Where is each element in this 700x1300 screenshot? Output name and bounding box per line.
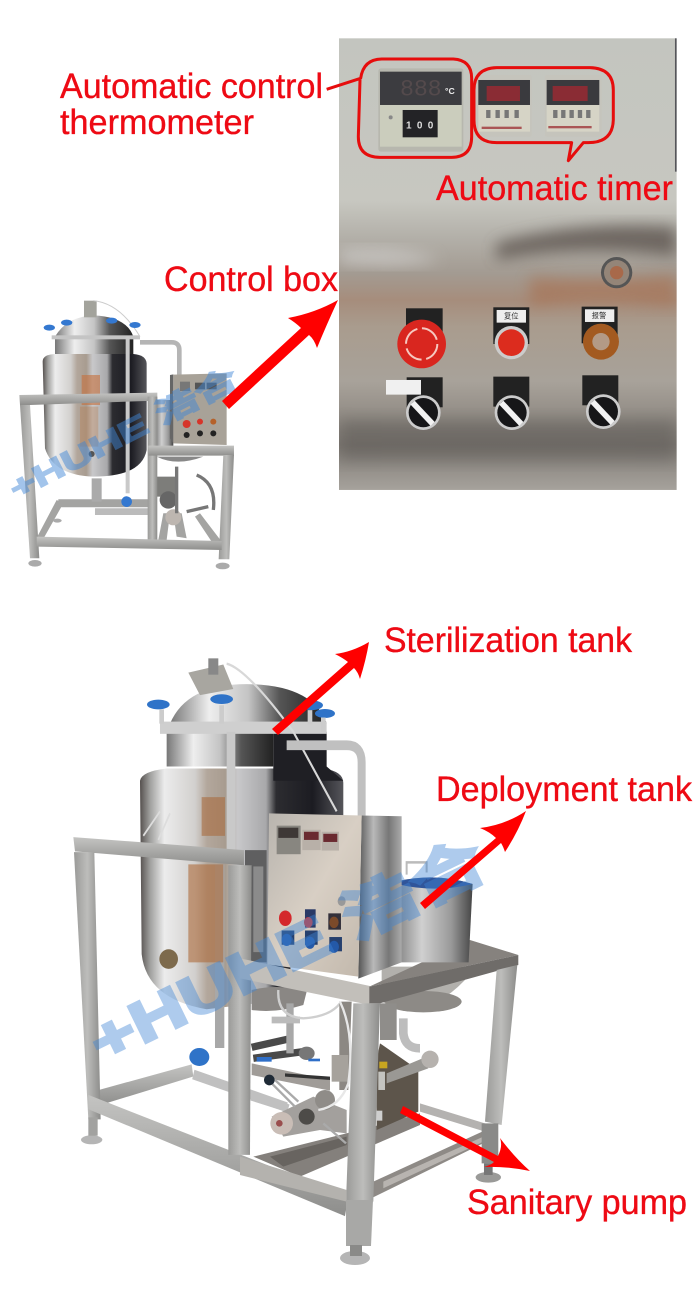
- thermometer: °C: [445, 86, 455, 96]
- sight glass: [245, 850, 267, 962]
- left pipe: [193, 1075, 287, 1107]
- label: automatic timer: Automatic timer: [436, 169, 673, 208]
- callout: thermometer outline: [327, 59, 472, 157]
- thermometer: 1 0 0: [406, 120, 434, 131]
- button: alarm lamp: 报警: [592, 310, 607, 321]
- label: deployment tank: Deployment tank: [436, 770, 692, 809]
- back bowl: [252, 987, 307, 1011]
- watermark: small machine: +HUHE 浩合: [4, 362, 244, 506]
- panel: control box photo: [327, 38, 677, 490]
- label: automatic control thermometer: [60, 67, 323, 142]
- fitting: [159, 949, 178, 969]
- button: alarm lamp: [582, 307, 619, 360]
- bottom rail end: [240, 1157, 347, 1202]
- blue handles: [147, 694, 335, 1066]
- control box: [170, 374, 173, 443]
- arrow: control box: [222, 300, 338, 409]
- tank: [43, 354, 147, 477]
- pump: [157, 477, 177, 497]
- control box: [267, 813, 402, 979]
- cross rails: [252, 1063, 330, 1091]
- pot: [157, 400, 173, 447]
- label: sanitary pump: Sanitary pump: [467, 1183, 687, 1222]
- pump box: [377, 1043, 418, 1130]
- pump head and valves: [272, 1097, 347, 1137]
- lower detail: table, pump, valves, posts: [240, 940, 518, 1202]
- arrow: sterilization tank: [272, 642, 369, 735]
- deployment tank: [400, 862, 473, 962]
- label: automatic control thermometer: thermometer: [60, 103, 254, 142]
- handles: [44, 318, 141, 507]
- large machine photo: [73, 658, 362, 1216]
- front foot: [340, 1200, 373, 1265]
- small machine photo: [19, 301, 234, 569]
- table: [240, 958, 370, 1005]
- button: reset: 复位: [504, 311, 519, 322]
- rotary switches: [386, 375, 621, 430]
- front post and right post: [346, 1003, 380, 1202]
- label: sterilization tank: Sterilization tank: [384, 621, 632, 660]
- arrow: sanitary pump: [400, 1106, 530, 1171]
- tubes: [252, 1038, 303, 1058]
- frame: [73, 837, 244, 865]
- thermometer: [378, 68, 463, 152]
- thermometer: 888: [400, 78, 442, 104]
- timers: [477, 75, 602, 137]
- label: control box: Control box: [164, 260, 338, 299]
- arrow: deployment tank: [420, 811, 526, 909]
- bowl: [382, 967, 465, 1009]
- feet: [81, 1135, 102, 1144]
- callout: timers outline: [474, 68, 613, 161]
- watermark: large machine: +HUHE 浩合: [79, 828, 496, 1076]
- button: reset: [493, 307, 529, 359]
- lower back rails: [88, 1064, 193, 1105]
- label: automatic control thermometer: Automatic control: [60, 67, 323, 106]
- button: emergency stop: [397, 308, 446, 368]
- tank body: [140, 769, 343, 1009]
- frame: [19, 393, 157, 405]
- pipe: [287, 745, 362, 815]
- icon: key lamp: [601, 257, 632, 288]
- vertical pipe: [339, 1002, 352, 1090]
